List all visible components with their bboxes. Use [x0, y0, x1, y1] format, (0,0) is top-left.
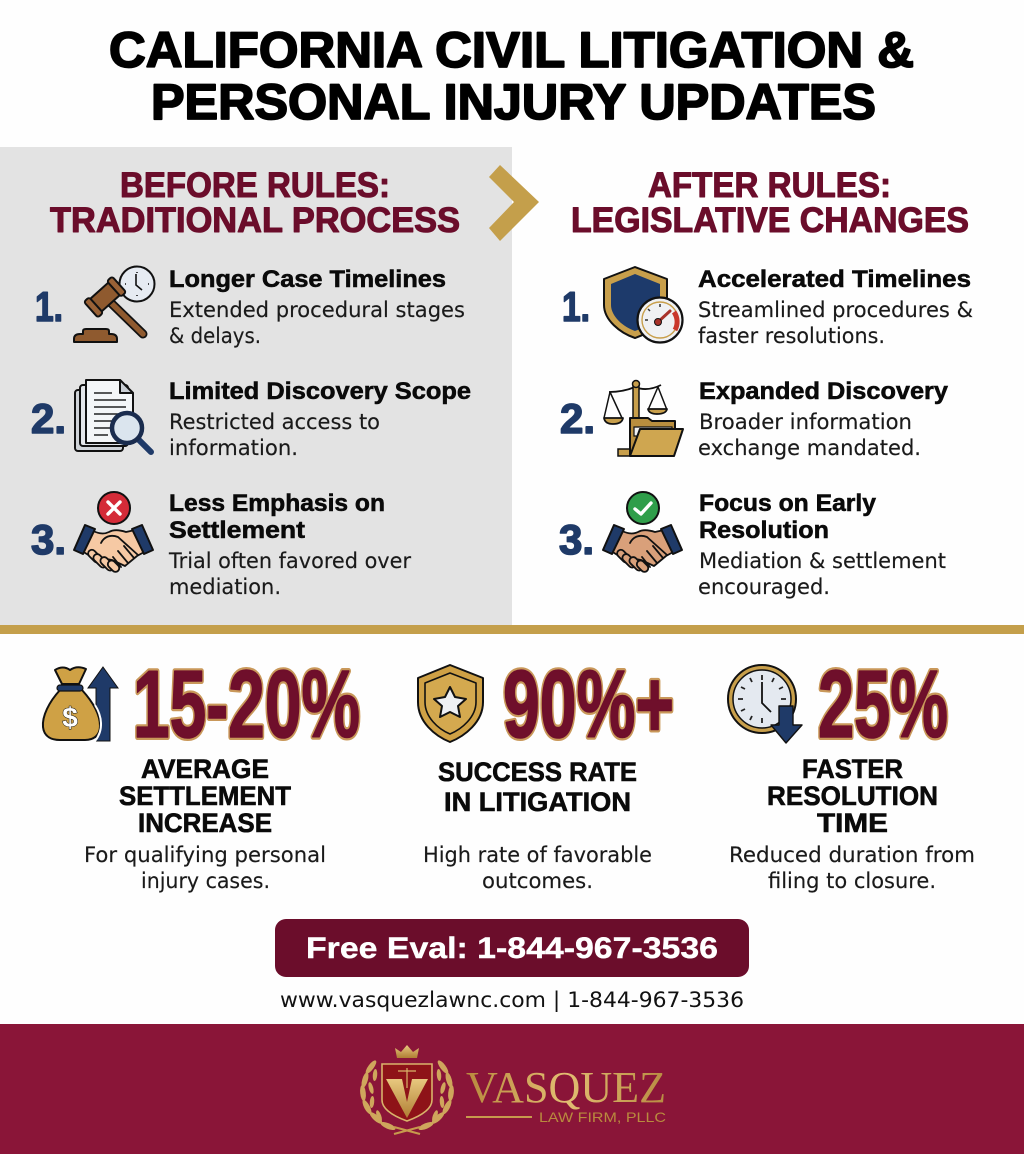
big number: 15-20% [133, 651, 360, 758]
icon: shield and gauge [604, 267, 682, 342]
label: faster resolution time: RESOLUTION [767, 781, 938, 811]
heading: after rules: LEGISLATIVE CHANGES [571, 200, 969, 240]
wordmark: VASQUEZ [466, 1063, 666, 1112]
text: limited discovery scope: information. [169, 436, 298, 461]
icon: handshake with red x [74, 492, 153, 573]
text: less emphasis on settlement: Less Emphasis on [169, 490, 385, 517]
text: limited discovery scope: Restricted access to [169, 410, 380, 435]
text: accelerated timelines [698, 266, 973, 349]
item: focus on early resolution: 3. [559, 516, 594, 563]
icon: gavel and clock [74, 266, 154, 342]
crown [395, 1045, 419, 1058]
label: success rate in litigation [438, 757, 637, 817]
icon: money bag with up arrow: $ [62, 702, 78, 733]
big number: 90%+: 90%+ [503, 651, 674, 758]
label: success rate in litigation: IN LITIGATION [444, 787, 631, 817]
text: expanded discovery: Expanded Discovery [699, 378, 949, 405]
heading: after rules [571, 165, 969, 240]
label: average settlement increase: SETTLEMENT [119, 781, 291, 811]
title: CALIFORNIA CIVIL LITIGATION & [109, 22, 914, 78]
item: accelerated timelines: 1. [562, 283, 590, 330]
text: accelerated timelines: faster resolutions. [698, 324, 885, 349]
description: qualifying cases [84, 843, 326, 894]
text: limited discovery scope [169, 378, 471, 461]
item: longer case timelines: 1. [35, 283, 63, 330]
label: average settlement increase [119, 754, 291, 838]
icon: shield with star [418, 665, 483, 742]
tagline: LAW FIRM, PLLC [539, 1109, 666, 1125]
shield [382, 1064, 432, 1121]
title [109, 22, 914, 130]
title: PERSONAL INJURY UPDATES [151, 74, 876, 130]
description: duration filing to closure: filing to closure. [768, 869, 936, 894]
description: duration filing to closure: Reduced duration from [729, 843, 975, 868]
text: accelerated timelines: Accelerated Timelines [698, 266, 971, 293]
description: qualifying cases: injury cases. [141, 869, 270, 894]
heading: after rules: AFTER RULES: [648, 165, 891, 205]
wreath ribbon [394, 1127, 420, 1134]
item: longer case timelines [35, 266, 465, 349]
label: faster resolution time [767, 754, 938, 838]
text: less emphasis on settlement: Trial often favored over [168, 549, 411, 574]
icon: clock with down arrow [728, 665, 802, 743]
description: qualifying cases: For qualifying personal [84, 843, 326, 868]
contact line: www.vasquezlawnc.com | 1-844-967-3536 [280, 988, 744, 1013]
arrow: gold chevron [489, 165, 539, 241]
call to action button: Free Eval: 1-844-967-3536 [306, 932, 718, 965]
big number: 15-20%: 15-20% [133, 651, 360, 758]
text: focus on early resolution: Resolution [699, 517, 829, 544]
heading: before rules [50, 165, 460, 240]
letter V [386, 1079, 428, 1118]
icon: scales and folder [604, 380, 683, 456]
text: accelerated timelines: Streamlined procedures & [698, 298, 973, 323]
description: favorable outcomes: outcomes. [482, 869, 593, 894]
text: focus on early resolution [698, 490, 946, 600]
logo: vasquez law firm [359, 1045, 666, 1134]
panel: after rules [559, 165, 973, 600]
item: expanded discovery: 2. [560, 395, 595, 442]
label: average settlement increase: INCREASE [138, 808, 272, 838]
description: duration filing to closure [729, 843, 975, 894]
text: longer case timelines: Longer Case Timelines [169, 266, 446, 293]
icon: handshake with green check [603, 492, 682, 573]
big number: 25%: 25% [818, 651, 948, 758]
description: favorable outcomes [423, 843, 652, 894]
description: favorable outcomes: High rate of favorable [423, 843, 652, 868]
text: less emphasis on settlement: mediation. [169, 575, 281, 600]
footer band [0, 1024, 1024, 1154]
text: longer case timelines: & delays. [169, 324, 261, 349]
text: expanded discovery: exchange mandated. [698, 436, 921, 461]
icon: documents and magnifier [75, 380, 151, 452]
panel: before rules [0, 147, 512, 625]
call to action button [275, 919, 749, 977]
scales mark [398, 1068, 416, 1088]
stat: faster resolution [728, 651, 975, 894]
item: limited discovery scope: 2. [31, 395, 66, 442]
item: focus on early resolution [559, 490, 946, 600]
big number: 90%+: 90%+ [503, 651, 674, 758]
stat: settlement increase [43, 651, 360, 894]
big number: 25%: 25% [818, 651, 948, 758]
label: faster resolution time: TIME [817, 808, 888, 838]
text: less emphasis on settlement: Settlement [169, 517, 305, 544]
icon: money bag with up arrow [43, 667, 118, 741]
text: less emphasis on settlement [168, 490, 411, 600]
text: expanded discovery: Broader information [699, 410, 912, 435]
big number: 90%+ [503, 651, 674, 758]
text: expanded discovery [698, 378, 949, 461]
heading: before rules: TRADITIONAL PROCESS [50, 200, 460, 240]
divider: gold rule [0, 625, 1024, 634]
stat: success rate [418, 651, 674, 894]
label: success rate in litigation: SUCCESS RATE [438, 757, 637, 787]
item: accelerated timelines [562, 266, 973, 349]
label: faster resolution time: FASTER [802, 754, 903, 784]
big number: 15-20%: 15-20% [133, 651, 360, 758]
wreath: left [359, 1059, 396, 1132]
item: less emphasis on settlement [31, 490, 411, 600]
big number: 25% [818, 651, 948, 758]
text: longer case timelines [169, 266, 465, 349]
item: limited discovery scope [31, 378, 471, 461]
item: expanded discovery [560, 378, 949, 461]
wreath: right [418, 1059, 455, 1132]
heading: before rules: BEFORE RULES: [120, 165, 390, 205]
label: average settlement increase: AVERAGE [141, 754, 269, 784]
item: less emphasis on settlement: 3. [31, 516, 66, 563]
text: longer case timelines: Extended procedural stages [169, 298, 465, 323]
rule [466, 1116, 532, 1118]
text: focus on early resolution: Mediation & settlement [699, 549, 946, 574]
text: focus on early resolution: encouraged. [698, 575, 830, 600]
text: focus on early resolution: Focus on Early [699, 490, 877, 517]
text: limited discovery scope: Limited Discovery Scope [169, 378, 471, 405]
